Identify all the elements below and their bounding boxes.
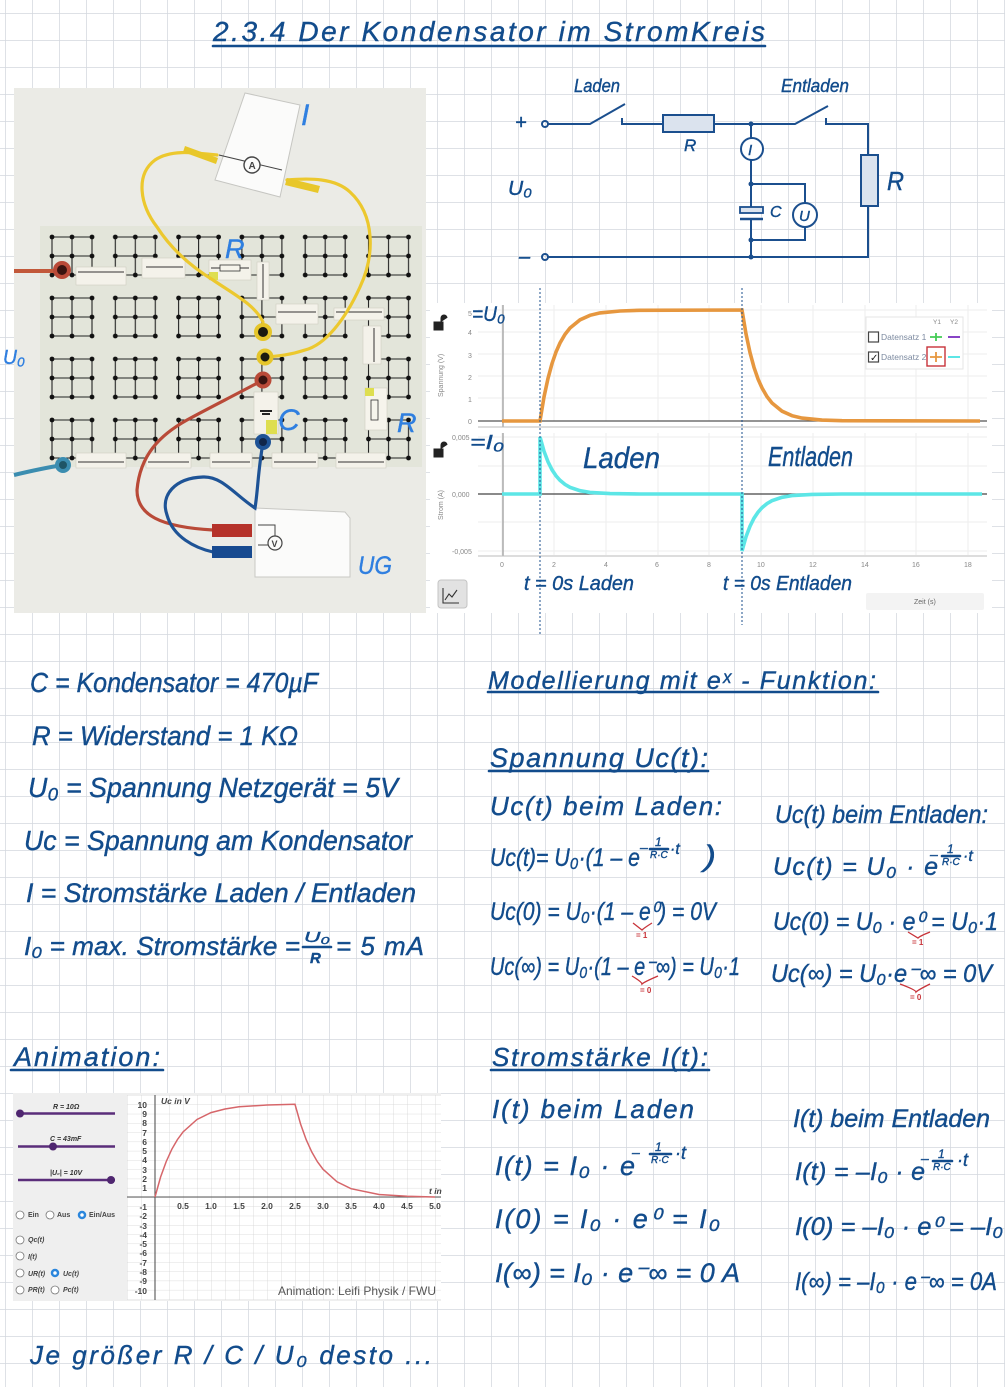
sliders and radio controls: Ein/Aus: [89, 1212, 115, 1219]
discharging current column: I(t) = –I₀ · e: [795, 1158, 925, 1186]
charging current column: [492, 1094, 740, 1288]
sliders and radio controls: Pc(t): [63, 1287, 79, 1294]
current chart: 12: [809, 562, 817, 569]
voltage chart: [438, 305, 987, 427]
sliders and radio controls: Ein: [28, 1212, 39, 1219]
photo labels: R: [225, 234, 244, 264]
sliders and radio controls: I(t): [28, 1254, 38, 1261]
photo labels: [225, 99, 416, 580]
blue cables: [14, 443, 263, 552]
charging current column: –: [631, 1144, 640, 1160]
animation chart: 0.5: [177, 1201, 189, 1211]
animation chart: 4: [142, 1155, 147, 1165]
discharging column: = 0: [910, 993, 922, 1002]
white connector modules: [76, 258, 387, 468]
animation chart: -8: [139, 1267, 147, 1277]
panel: measurement charts: [430, 288, 992, 636]
circuit diagram: [508, 76, 904, 268]
animation chart: 7: [142, 1128, 147, 1138]
current chart: 10: [757, 562, 765, 569]
definition: capacitor: C = Kondensator = 470µF: [30, 667, 320, 698]
circuit labels: R: [684, 136, 696, 155]
legend: [866, 317, 963, 369]
animation chart: 10: [138, 1100, 147, 1110]
current chart: 4: [604, 562, 608, 569]
animation chart: -3: [139, 1221, 147, 1231]
animation chart: 2: [142, 1174, 147, 1184]
animation chart: -9: [139, 1276, 147, 1286]
legend: Datensatz 2: [881, 352, 927, 362]
definition: max current: I₀ = max. Stromstärke =: [24, 931, 300, 961]
sliders and radio controls: [16, 1104, 115, 1294]
ammeter module: A: [248, 161, 256, 172]
animation chart: 1.0: [205, 1201, 217, 1211]
circuit labels: C: [770, 204, 782, 221]
current meter: [741, 138, 763, 160]
discharging column: Uc(t) = U₀ · e: [773, 853, 938, 881]
sliders and radio controls: UR(t): [28, 1271, 46, 1278]
charging column: Uc(∞) = U₀·(1 – e⁻∞) = U₀·1: [490, 953, 740, 981]
animation chart: -10: [135, 1286, 147, 1296]
charging current column: I(t) = I₀ · e: [495, 1151, 635, 1181]
chart handwritten labels: [470, 303, 853, 595]
animation chart: -5: [139, 1239, 147, 1249]
photo labels: R: [397, 408, 416, 438]
circuit wires and switches: [542, 104, 868, 260]
animation chart: [127, 1095, 442, 1300]
definition: max current: U₀: [304, 929, 330, 946]
animation heading: Animation:: [12, 1042, 160, 1072]
charging column: = 0: [640, 986, 652, 995]
charging column: = 1: [636, 931, 648, 940]
animation chart: t in: [429, 1186, 442, 1196]
legend: Y1: [933, 319, 941, 326]
discharging column: [771, 801, 998, 1002]
current meter: I: [748, 142, 752, 159]
chart handwritten labels: Laden: [583, 442, 660, 475]
lock icon: [434, 315, 447, 330]
photo labels: C: [278, 404, 300, 437]
current section: [491, 1042, 1003, 1296]
animation chart: -7: [139, 1258, 147, 1268]
current chart: Strom (A): [438, 490, 445, 520]
sliders and radio controls: Qc(t): [28, 1237, 45, 1244]
charging current column: I(t) beim Laden: [492, 1094, 694, 1124]
capacitor: [740, 207, 763, 219]
discharging current column: 1: [938, 1147, 945, 1161]
discharging current column: R·C: [933, 1162, 952, 1173]
heading: current: Stromstärke I(t):: [492, 1042, 708, 1072]
voltage chart: 2: [468, 375, 472, 382]
voltmeter: U: [799, 208, 810, 225]
current chart: [438, 433, 987, 569]
animation chart: 6: [142, 1137, 147, 1147]
definition: supply voltage: U₀ = Spannung Netzgerät = 5V: [28, 772, 400, 803]
sliders and radio controls: |U₀| = 10V: [50, 1170, 83, 1177]
current chart: 16: [912, 562, 920, 569]
animation chart: 3.0: [317, 1201, 329, 1211]
discharging column: Uc(∞) = U₀·e⁻∞ = 0V: [771, 960, 994, 988]
panel: photo of the experiment: [14, 88, 426, 613]
voltage chart: 4: [468, 330, 472, 337]
current chart: 8: [707, 562, 711, 569]
charging current column: I(0) = I₀ · e⁰ = I₀: [495, 1204, 720, 1234]
voltmeter module: [255, 508, 350, 577]
photo labels: UG: [358, 552, 392, 580]
animation chart: 8: [142, 1118, 147, 1128]
charging column: 1: [655, 835, 662, 849]
definition: current: I = Stromstärke Laden / Entladen: [26, 878, 416, 908]
charging current column: 1: [655, 1140, 662, 1154]
red cables: [14, 271, 263, 530]
time axis button: Zeit (s): [914, 599, 936, 606]
animation chart: -6: [139, 1248, 147, 1258]
current chart: 0,005: [452, 435, 470, 442]
animation chart: 3.5: [345, 1201, 357, 1211]
animation chart: 2.5: [289, 1201, 301, 1211]
discharging current column: –: [920, 1150, 929, 1166]
animation chart: 4.5: [401, 1201, 413, 1211]
charging column: –: [639, 839, 648, 855]
animation chart: -2: [139, 1211, 147, 1221]
charging current column: R·C: [651, 1155, 670, 1166]
circuit labels: –: [518, 246, 531, 268]
voltage chart: Spannung (V): [438, 354, 445, 397]
current chart: 0,000: [452, 492, 470, 499]
heading: modelling: Modellierung mit eˣ - Funktion:: [488, 667, 876, 695]
animation chart: Animation: Leifi Physik / FWU: [278, 1284, 436, 1298]
current chart: -0,005: [452, 549, 472, 556]
voltage section: [489, 743, 998, 1002]
current chart: 0: [500, 562, 504, 569]
charging current column: ·t: [675, 1143, 687, 1163]
animation chart: 1.5: [233, 1201, 245, 1211]
charging current column: I(∞) = I₀ · e⁻∞ = 0 A: [495, 1258, 740, 1288]
chart dashed markers: [540, 288, 742, 636]
circuit labels: +: [515, 112, 527, 134]
voltage chart: 1: [468, 397, 472, 404]
animation chart: 3: [142, 1165, 147, 1175]
chart tool button: [438, 580, 467, 608]
panel: animation: [13, 1093, 442, 1301]
voltage chart: 3: [468, 353, 472, 360]
voltage chart: 0: [468, 419, 472, 426]
circuit labels: U₀: [508, 178, 532, 200]
animation chart: -4: [139, 1230, 147, 1240]
sliders and radio controls: Aus: [57, 1212, 70, 1219]
label: U0 at board: U₀: [3, 347, 25, 369]
circuit labels: Entladen: [781, 76, 849, 96]
animation chart: 1: [142, 1183, 147, 1193]
photo labels: I: [301, 99, 309, 132]
current chart: 6: [655, 562, 659, 569]
definition: capacitor voltage: Uc = Spannung am Kondensator: [24, 825, 414, 856]
legend: Datensatz 1: [881, 332, 927, 342]
chart handwritten labels: =U₀: [472, 303, 505, 326]
heading: voltage: Spannung Uc(t):: [490, 743, 708, 773]
voltmeter module: V: [272, 539, 278, 549]
definitions list: [24, 667, 424, 967]
chart handwritten labels: t = 0s Laden: [524, 573, 634, 595]
chart handwritten labels: t = 0s Entladen: [723, 573, 852, 595]
charging column: [490, 791, 740, 995]
animation chart: -1: [139, 1202, 147, 1212]
discharging column: –: [929, 846, 938, 862]
discharging column: Uc(t) beim Entladen:: [775, 801, 988, 829]
charging column: Uc(t)= U₀·(1 – e: [490, 844, 640, 872]
charging column: ): [700, 840, 716, 873]
ammeter module: [215, 93, 300, 197]
current chart: 2: [552, 562, 556, 569]
time axis button: [866, 593, 984, 610]
animation chart: 2.0: [261, 1201, 273, 1211]
discharging column: 1: [947, 842, 954, 856]
voltage chart: 5: [468, 311, 472, 318]
chart handwritten labels: =I₀: [470, 432, 504, 454]
definition: max current: [24, 929, 424, 967]
sliders and radio controls: R = 10Ω: [53, 1104, 80, 1111]
yellow cables: [142, 153, 370, 357]
animation chart: 5: [142, 1146, 147, 1156]
lock icon: [434, 442, 447, 457]
resistor horizontal: [663, 115, 714, 132]
legend: Y2: [950, 319, 958, 326]
discharging column: R·C: [942, 857, 961, 868]
charging column: Uc(0) = U₀·(1 – e⁰) = 0V: [490, 898, 718, 926]
animation chart: 9: [142, 1109, 147, 1119]
sliders and radio controls: C = 43mF: [50, 1136, 82, 1143]
discharging current column: I(t) beim Entladen: [793, 1105, 990, 1133]
sliders and radio controls: Uc(t): [63, 1271, 80, 1278]
current chart: 14: [861, 562, 869, 569]
animation chart: Uc in V: [161, 1096, 191, 1106]
charging column: R·C: [650, 850, 669, 861]
discharging current column: I(0) = –I₀ · e⁰ = –I₀: [795, 1213, 1003, 1241]
closing question: Je größer R / C / U₀ desto ...: [29, 1340, 432, 1370]
definition: max current: = 5 mA: [336, 931, 424, 961]
discharging current column: [793, 1105, 1003, 1296]
discharging column: = 1: [912, 938, 924, 947]
definition: resistor: R = Widerstand = 1 KΩ: [32, 721, 298, 751]
circuit labels: Laden: [574, 76, 620, 96]
voltmeter: [793, 203, 817, 227]
resistor vertical: [861, 155, 878, 206]
legend: ✓: [870, 353, 878, 364]
sliders and radio controls: PR(t): [28, 1287, 45, 1294]
circuit labels: [508, 76, 904, 268]
charging column: Uc(t) beim Laden:: [490, 791, 722, 821]
definition: max current: R: [310, 950, 321, 967]
animation chart: 4.0: [373, 1201, 385, 1211]
title: 2.3.4 Der Kondensator im StromKreis: [212, 16, 765, 47]
discharging column: ·t: [963, 848, 973, 865]
circuit labels: R: [887, 166, 904, 196]
chart handwritten labels: Entladen: [768, 441, 853, 472]
animation chart: 5.0: [429, 1201, 441, 1211]
charging column: ·t: [670, 841, 680, 858]
discharging current column: ·t: [957, 1150, 969, 1170]
current chart: 18: [964, 562, 972, 569]
circuit board: [40, 226, 424, 467]
